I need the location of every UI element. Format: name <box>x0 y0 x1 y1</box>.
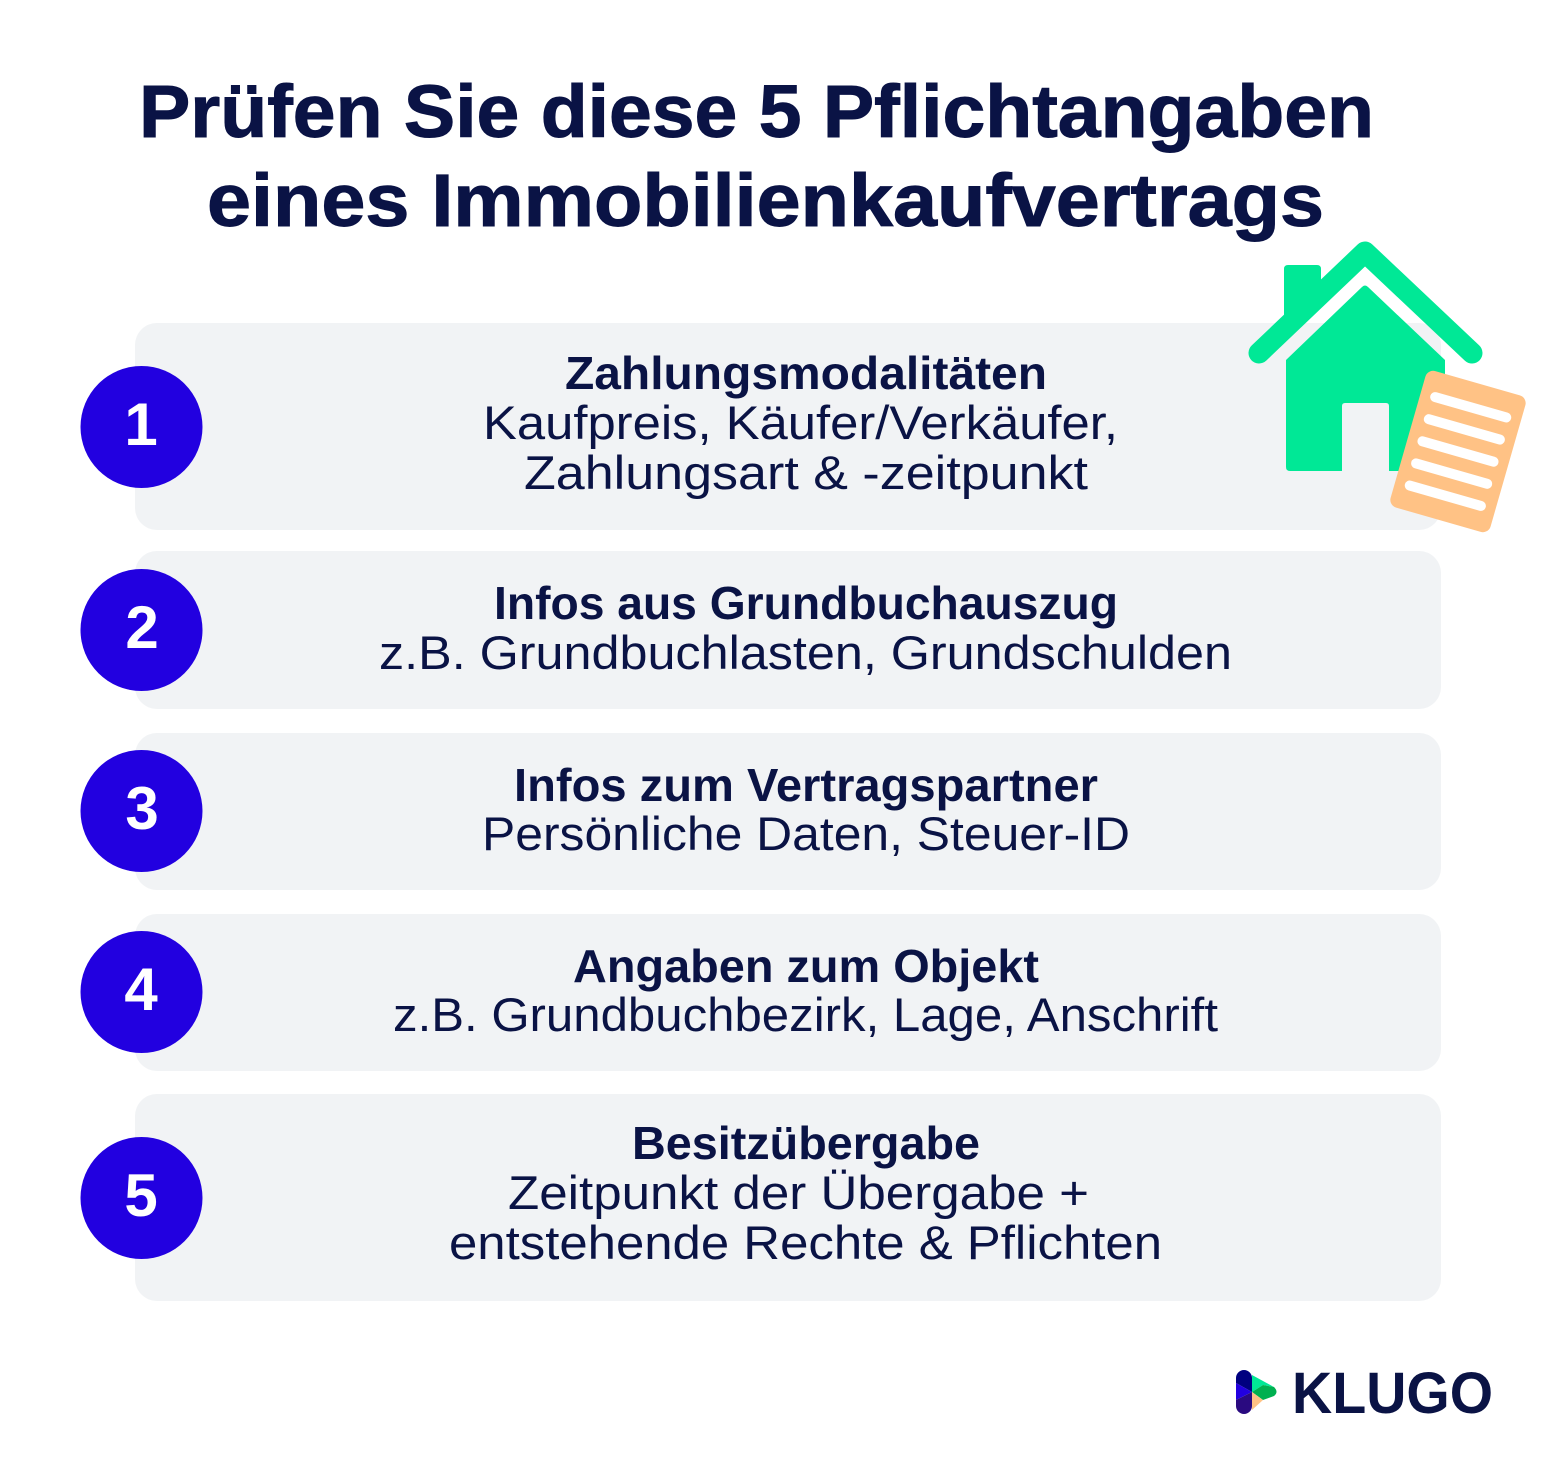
badge: 1 <box>80 366 202 488</box>
heading: Infos aus Grundbuchauszug: Infos aus Grundbuchauszug <box>494 577 1118 629</box>
icon: house <box>1259 252 1472 471</box>
text: Zeitpunkt der Übergabe: Zeitpunkt der Übergabe + <box>508 1166 1089 1219</box>
icon: logo play mark <box>1236 1370 1276 1414</box>
badge: 1: 1 <box>124 391 158 458</box>
title: eines Immobilienkaufvertrags <box>207 159 1324 242</box>
heading: Infos zum Vertragspartner: Infos zum Vertragspartner <box>514 759 1098 811</box>
text: Rechte und Pflichten: entstehende Rechte & Pflichten <box>449 1216 1162 1269</box>
text: KLUGO wordmark: KLUGO <box>1292 1361 1493 1426</box>
panel: Zahlungsmodalitäten <box>135 323 1441 530</box>
heading: Zahlungsmodalitäten: Zahlungsmodalitäten <box>565 347 1047 399</box>
text: Grundbuchbezirk: z.B. Grundbuchbezirk, Lage, Anschrift <box>393 988 1218 1041</box>
panel: Besitzübergabe <box>135 1094 1441 1301</box>
title <box>139 70 1374 242</box>
icon: house with document <box>1259 252 1528 534</box>
heading: Angaben zum Objekt: Angaben zum Objekt <box>573 940 1039 992</box>
logo: KLUGO <box>1236 1361 1493 1426</box>
badge: 5 <box>80 1137 202 1259</box>
badge: 5: 5 <box>124 1162 158 1229</box>
badge: 3: 3 <box>125 775 159 842</box>
panel: Infos aus Grundbuchauszug <box>135 551 1441 709</box>
panel: Angaben zum Objekt <box>135 914 1441 1071</box>
title: Prüfen Sie diese 5 Pflichtangaben <box>139 70 1374 153</box>
badge: 3 <box>80 750 202 872</box>
badge: 2 <box>80 569 202 691</box>
text: Grundbuchlasten: z.B. Grundbuchlasten, Grundschulden <box>379 626 1232 679</box>
heading: Besitzübergabe: Besitzübergabe <box>632 1117 980 1169</box>
text: Persönliche Daten: Persönliche Daten, Steuer-ID <box>482 807 1130 860</box>
icon: document <box>1388 369 1528 534</box>
badge: 4: 4 <box>124 956 158 1023</box>
text: Zahlungsart: Zahlungsart & -zeitpunkt <box>524 446 1088 499</box>
badge: 4 <box>80 931 202 1053</box>
text: Kaufpreis: Kaufpreis, Käufer/Verkäufer, <box>483 396 1118 449</box>
badge: 2: 2 <box>125 594 159 661</box>
panel: Infos zum Vertragspartner <box>135 733 1441 890</box>
